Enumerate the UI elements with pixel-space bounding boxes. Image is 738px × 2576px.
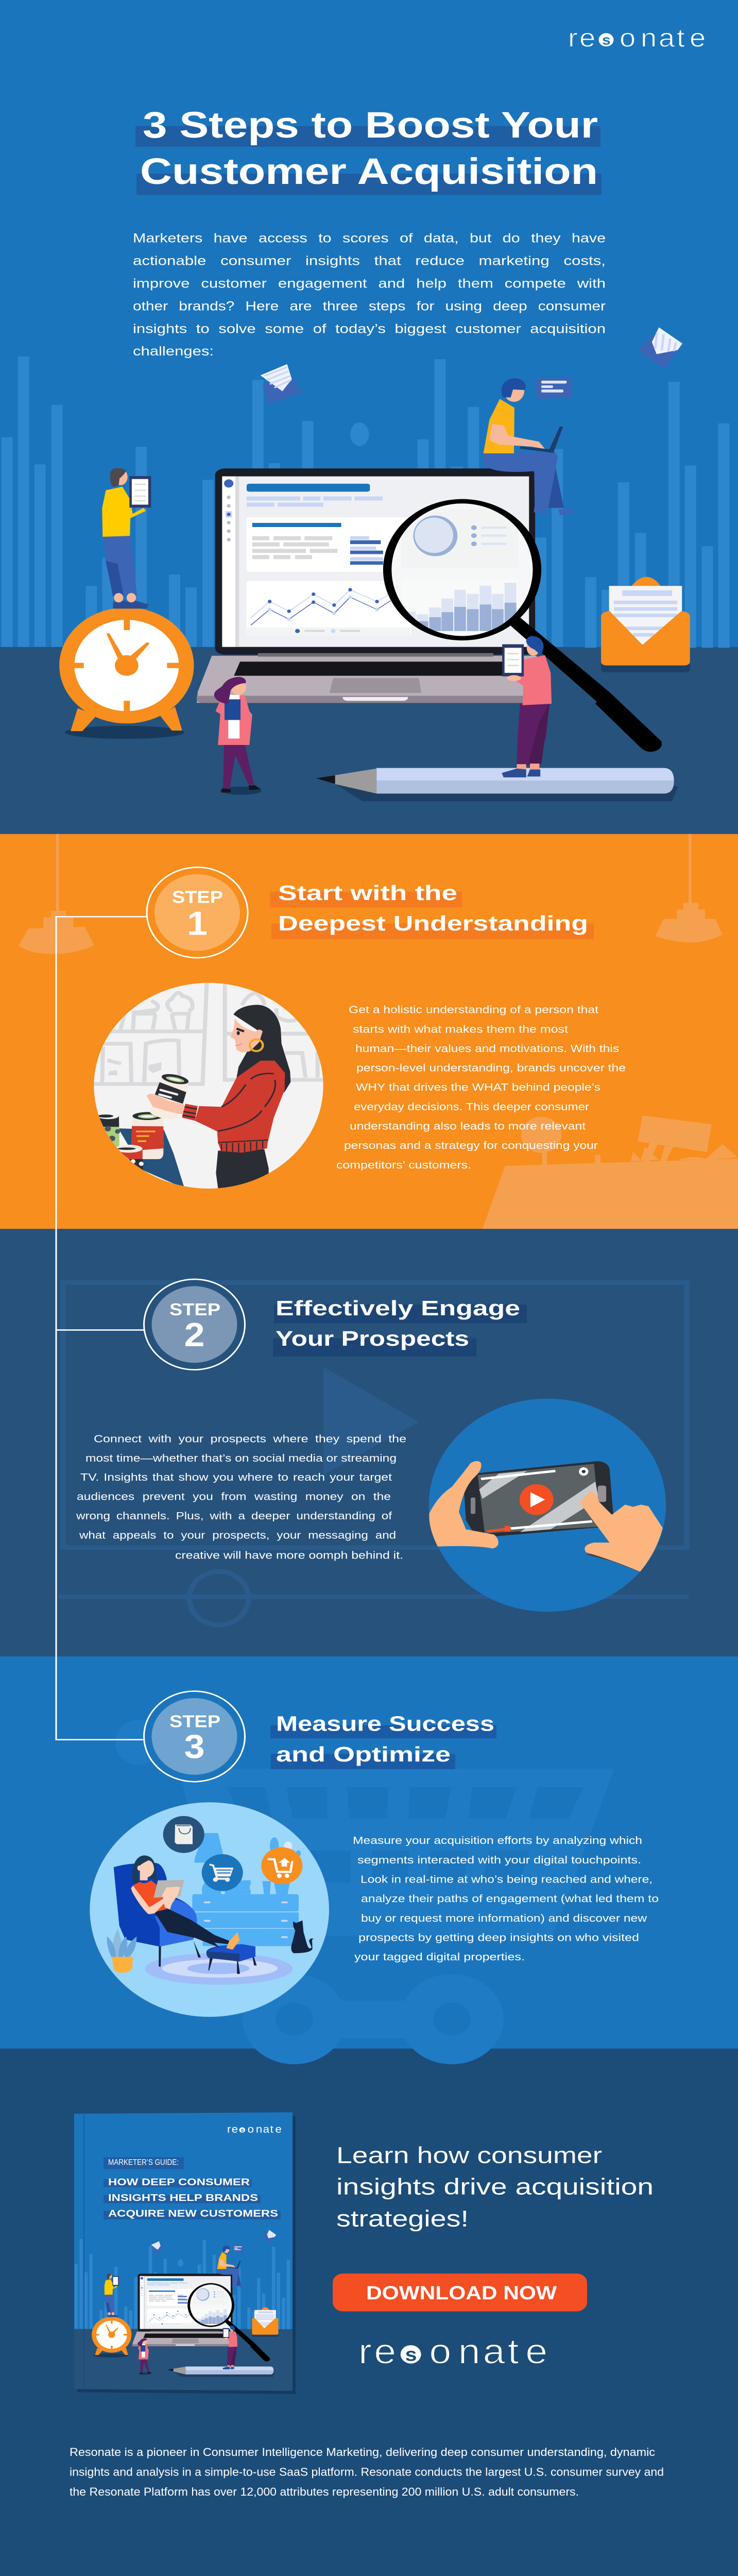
ground band [0, 647, 738, 834]
step 3 paragraph: segments interacted with your digital touchpoints. [357, 1854, 641, 1866]
intro paragraph: improve customer engagement and help them compete with [133, 276, 606, 291]
step 2 paragraph: Connect with your prospects where they spend the [94, 1433, 406, 1445]
rug [145, 1953, 293, 1985]
logo: resonate top: re [568, 24, 595, 53]
call to action heading: insights drive acquisition [336, 2174, 654, 2200]
chat bubble [535, 378, 572, 400]
person with tablet on clock [102, 468, 151, 608]
step 3 paragraph [353, 1834, 659, 1963]
step 3 heading [270, 1712, 496, 1769]
about paragraph [70, 2446, 664, 2499]
background bar chart [2, 357, 730, 648]
step 2 badge [144, 1279, 245, 1370]
book logo: s [241, 2128, 244, 2133]
about paragraph: insights and analysis in a simple-to-use SaaS platform. Resonate conducts the largest U.S. consumer survey and [70, 2466, 664, 2479]
step 3 paragraph: Measure your acquisition efforts by analyzing which [353, 1834, 642, 1846]
intro paragraph: Marketers have access to scores of data, but do they have [133, 231, 606, 245]
floating envelope left [260, 364, 302, 403]
pencil [316, 768, 678, 801]
logo: resonate top: onate [620, 24, 706, 53]
book title [104, 2157, 281, 2219]
cat [291, 1920, 314, 1953]
man with phone [502, 636, 552, 777]
step 2 badge: 2 [184, 1316, 205, 1353]
step 2 paragraph: wrong channels. Plus, with a deeper understanding of [76, 1510, 392, 1522]
step 2 paragraph: TV. Insights that show you where to reach your target [80, 1471, 392, 1483]
call to action heading [336, 2143, 654, 2232]
step 2 paragraph: audiences prevent you from wasting money on the [77, 1490, 391, 1502]
step 2 background panel [0, 1229, 738, 1656]
step 1 paragraph: personas and a strategy for conquesting your [344, 1139, 598, 1151]
book logo: onate [248, 2124, 282, 2135]
step 1 badge: STEP [172, 888, 223, 907]
book title: HOW DEEP CONSUMER [108, 2177, 250, 2188]
step 1 paragraph: competitors’ customers. [336, 1159, 471, 1171]
logo: resonate large: s [405, 2345, 417, 2365]
step 1 heading [270, 881, 594, 939]
intro paragraph [133, 231, 606, 359]
step 3 illustration: woman in armchair shopping [90, 1802, 329, 2017]
intro paragraph: insights to solve some of today’s biggest customer acquisition [133, 321, 606, 336]
step 2 illustration: phone playing video [429, 1399, 666, 1612]
step 3 badge [144, 1691, 245, 1782]
table [118, 1128, 184, 1189]
step 2 decorative video frame [59, 1280, 690, 1628]
hero background [0, 0, 738, 647]
book logo [227, 2124, 282, 2135]
clock [59, 607, 194, 739]
icon: cart with arrow [261, 1848, 302, 1884]
step 3 decorative shopping cart [115, 1720, 614, 2064]
step 3 paragraph: prospects by getting deep insights on who visited [358, 1931, 639, 1943]
download button [333, 2274, 587, 2311]
step 2 paragraph: most time—whether that’s on social media or streaming [85, 1452, 397, 1464]
potted plant [107, 1929, 136, 1957]
call to action heading: strategies! [336, 2206, 469, 2232]
step 1 badge: 1 [187, 905, 208, 942]
step 2 paragraph [76, 1433, 406, 1561]
step 3 badge: 3 [184, 1728, 205, 1766]
call to action heading: Learn how consumer [336, 2143, 602, 2168]
icon: shopping bag [163, 1816, 204, 1853]
step 1 paragraph: WHY that drives the WHAT behind people’s [356, 1081, 600, 1093]
step 3 paragraph: your tagged digital properties. [354, 1951, 525, 1963]
phone [464, 1461, 613, 1537]
hero illustration [2, 327, 730, 801]
title [135, 105, 602, 195]
small can [116, 1148, 143, 1159]
step 1 heading: Deepest Understanding [278, 911, 588, 936]
book title: MARKETER’S GUIDE: [108, 2158, 179, 2167]
floating envelope right [638, 327, 682, 368]
step 1 paragraph: starts with what makes them the most [353, 1023, 568, 1035]
logo: resonate large: onate [429, 2332, 547, 2371]
intro paragraph: challenges: [133, 344, 214, 359]
step 1 paragraph: human—their values and motivations. With this [355, 1042, 619, 1055]
red can [131, 1117, 163, 1159]
step 2 badge: STEP [169, 1300, 220, 1319]
held can [150, 1078, 189, 1119]
book title: ACQUIRE NEW CUSTOMERS [108, 2209, 278, 2219]
step 3 heading: and Optimize [276, 1742, 451, 1766]
green can [101, 1122, 119, 1148]
left hand [429, 1461, 499, 1548]
step 3 background panel [0, 1656, 738, 2048]
person on monitor with laptop [483, 378, 574, 515]
step 2 heading [273, 1296, 527, 1357]
woman with tablet [214, 677, 262, 795]
step 3 paragraph: buy or request more information) and discover new [361, 1912, 647, 1924]
envelope on ground [601, 577, 690, 672]
icon: shopping cart [202, 1854, 243, 1891]
step 2 heading: Your Prospects [276, 1327, 469, 1350]
logo: resonate top [568, 24, 706, 53]
decorative lamps and stall [19, 834, 738, 1229]
about paragraph: Resonate is a pioneer in Consumer Intelligence Marketing, delivering deep consumer understanding, dynamic [70, 2446, 655, 2459]
step 2 paragraph: what appeals to your prospects, your messaging and [79, 1529, 396, 1541]
intro paragraph: actionable consumer insights that reduce marketing costs, [133, 253, 606, 268]
step 1 illustration: woman holding can [93, 979, 324, 1189]
logo: resonate large [358, 2332, 547, 2371]
book logo: re [227, 2124, 238, 2135]
step 3 badge: STEP [169, 1712, 220, 1731]
title: 3 Steps to Boost Your [143, 105, 598, 146]
woman [216, 1149, 269, 1189]
step 2 paragraph: creative will have more oomph behind it. [175, 1549, 403, 1561]
step 1 paragraph: understanding also leads to more relevant [350, 1120, 586, 1132]
book title: INSIGHTS HELP BRANDS [108, 2193, 258, 2204]
title: Customer Acquisition [140, 151, 598, 192]
step 1 paragraph: person-level understanding, brands uncover the [356, 1062, 626, 1074]
drawers [192, 1894, 299, 1946]
logo: resonate top: s [602, 32, 611, 48]
book mini hero illustration [74, 2114, 293, 2391]
ottoman [208, 1957, 256, 1974]
step 1 paragraph: Get a holistic understanding of a person that [349, 1004, 598, 1015]
step 3 heading: Measure Success [276, 1712, 494, 1736]
bottom panel background [0, 2048, 738, 2576]
logo: resonate large: re [358, 2332, 396, 2371]
step 3 paragraph: Look in real-time at who’s being reached and where, [361, 1873, 653, 1885]
lamp and shelf decor [194, 1833, 301, 1894]
armchair [193, 1939, 201, 1958]
step 2 heading: Effectively Engage [276, 1296, 520, 1320]
step 1 heading: Start with the [278, 881, 457, 905]
monitor [215, 468, 535, 655]
step 1 badge [147, 867, 248, 958]
about paragraph: the Resonate Platform has over 12,000 attributes representing 200 million U.S. adult consumers. [70, 2486, 579, 2499]
shop shelves [93, 979, 324, 1085]
download button: DOWNLOAD NOW [366, 2283, 557, 2304]
right hand [586, 1553, 645, 1572]
step 1 paragraph: everyday decisions. This deeper consumer [354, 1100, 589, 1113]
laptop base [197, 653, 541, 703]
connector line [56, 917, 147, 1740]
guide book cover [74, 2112, 296, 2394]
step 3 paragraph: analyze their paths of engagement (what led them to [361, 1892, 659, 1905]
panel: step 1 [0, 834, 738, 1229]
intro paragraph: other brands? Here are three steps for using deep consumer [133, 299, 606, 313]
woman [155, 1909, 230, 1947]
step 1 paragraph [336, 1004, 626, 1171]
magnifying glass [383, 499, 662, 752]
